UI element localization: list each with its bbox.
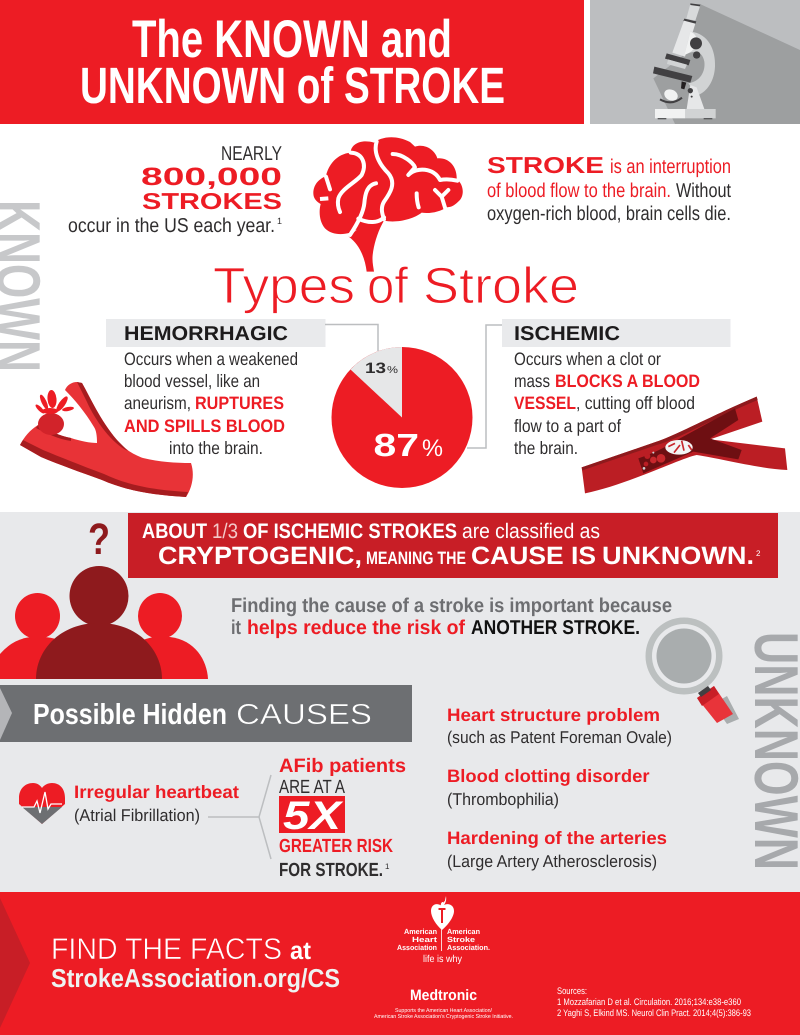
sources: 1 Mozzafarian D et al. Circulation. 2016;134:e38-e360 (557, 997, 741, 1008)
callout: cryptogenic banner: 2 (756, 549, 761, 558)
heading: possible hidden causes (0, 685, 412, 742)
callout: AFib 5X risk: FOR STROKE. (279, 860, 383, 881)
pie chart: stroke types: % (387, 365, 398, 376)
sources (557, 986, 751, 1019)
stat: 800,000 strokes: 800,000 (141, 163, 282, 191)
callout: cryptogenic banner: 1/3 (212, 520, 238, 543)
icon: question mark: ? (88, 515, 110, 564)
sources: Sources: (557, 986, 587, 997)
stroke definition: is an interruption (610, 156, 731, 178)
logo: American Heart / Stroke Association: American (447, 927, 480, 936)
header banner (0, 0, 584, 124)
text: why finding the cause matters: ANOTHER STROKE. (471, 617, 640, 639)
cause: blood clotting disorder: Blood clotting disorder (447, 766, 650, 786)
stroke definition: oxygen-rich blood, brain cells die. (487, 203, 731, 225)
hemorrhagic heading (106, 319, 326, 347)
cause: blood clotting disorder: (Thrombophilia) (447, 790, 559, 809)
cause: heart structure problem: Heart structure problem (447, 705, 660, 725)
logo: American Heart / Stroke Association: Association. (447, 943, 490, 952)
stat: 800,000 strokes (68, 143, 282, 237)
logo: American Heart / Stroke Association: Stroke (447, 935, 475, 944)
logo: American Heart / Stroke Association: life is why (423, 954, 462, 965)
logo: American Heart / Stroke Association: Association (397, 943, 437, 952)
cause: hardening of the arteries: (Large Artery Atherosclerosis) (447, 852, 657, 871)
ischemic description: , cutting off blood (576, 393, 695, 413)
cause: hardening of the arteries: Hardening of the arteries (447, 828, 667, 848)
title (80, 10, 505, 114)
stroke definition (487, 152, 731, 225)
callout: AFib 5X risk (279, 755, 406, 881)
hemorrhagic description: Occurs when a weakened (124, 349, 298, 369)
cause: irregular heartbeat (74, 782, 239, 825)
heading: possible hidden causes: Possible Hidden (33, 699, 227, 731)
5X badge: 5X (283, 794, 344, 838)
text: why finding the cause matters (231, 595, 672, 639)
callout: cryptogenic banner: ABOUT (142, 520, 207, 543)
ischemic description: the brain. (514, 438, 578, 458)
footer panel (0, 892, 800, 1035)
title: UNKNOWN of STROKE (80, 57, 505, 114)
callout: AFib 5X risk: 1 (385, 862, 390, 871)
call to action: at (290, 937, 312, 965)
logo: Medtronic sponsor: American Stroke Association's Cryptogenic Stroke Initiative. (374, 1014, 513, 1020)
callout: AFib 5X risk: AFib patients (279, 755, 406, 777)
cause: irregular heartbeat: (Atrial Fibrillation) (74, 806, 200, 825)
ischemic description: BLOCKS A BLOOD (555, 371, 700, 391)
cause: irregular heartbeat: Irregular heartbeat (74, 782, 239, 802)
text: why finding the cause matters: Finding the cause of a stroke is important because (231, 595, 672, 617)
panel: ischemic (502, 319, 787, 493)
cause: heart structure problem (447, 705, 672, 747)
hemorrhagic description (124, 349, 298, 458)
stat: 800,000 strokes: STROKES (142, 188, 282, 214)
callout: cryptogenic banner: UNKNOWN. (602, 542, 754, 570)
title: The KNOWN and (132, 10, 452, 69)
panel: unknown section background (0, 512, 800, 892)
callout: AFib 5X risk: ARE AT A (279, 777, 345, 798)
ischemic description: Occurs when a clot or (514, 349, 661, 369)
callout: cryptogenic banner (128, 513, 778, 578)
icon: microscope panel (590, 0, 800, 124)
icon: blocked vessel (582, 397, 787, 493)
hemorrhagic description: AND SPILLS BLOOD (124, 416, 285, 436)
pie chart: stroke types (332, 347, 472, 488)
hemorrhagic description: into the brain. (169, 438, 263, 458)
logo: American Heart / Stroke Association: Heart (412, 935, 438, 944)
stat: 800,000 strokes: NEARLY (221, 143, 282, 165)
callout: cryptogenic banner: are classified as (462, 520, 600, 543)
cause: hardening of the arteries (447, 828, 667, 871)
logo: Medtronic sponsor: Supports the American Heart Association/ (395, 1008, 492, 1014)
connector: bracket to AFib risk (208, 775, 271, 859)
ischemic heading (502, 319, 730, 347)
heading: Types of Stroke: Stroke (423, 257, 579, 314)
ischemic description: mass (514, 371, 550, 391)
icon: brain (313, 137, 463, 272)
ischemic description: VESSEL (514, 393, 576, 413)
stroke definition: of blood flow to the brain. (487, 180, 671, 202)
call to action (51, 933, 340, 993)
panel: hemorrhagic (20, 319, 326, 497)
stat: 800,000 strokes: 1 (277, 216, 282, 226)
logo: Medtronic sponsor (374, 987, 513, 1020)
cause: blood clotting disorder (447, 766, 650, 809)
text: why finding the cause matters: helps reduce the risk of (247, 617, 465, 639)
icon: magnifying glass (646, 618, 739, 724)
callout: cryptogenic banner: CRYPTOGENIC, (158, 542, 362, 570)
pie chart: stroke types: 87 (374, 427, 419, 463)
connector: hemorrhagic to pie (325, 324, 378, 351)
logo: American Heart / Stroke Association (397, 896, 490, 965)
callout: cryptogenic banner: CAUSE IS (471, 542, 596, 570)
callout: cryptogenic banner: MEANING THE (366, 548, 466, 568)
stroke definition: Without (676, 180, 731, 202)
ischemic description (514, 349, 700, 458)
connector: pie to ischemic (467, 325, 502, 448)
call to action: FIND THE FACTS (51, 933, 282, 966)
pie chart: stroke types: 13 (365, 360, 386, 377)
callout: AFib 5X risk: GREATER RISK (279, 836, 393, 857)
stat: 800,000 strokes: occur in the US each year. (68, 215, 275, 237)
heading: possible hidden causes: CAUSES (236, 699, 372, 731)
hemorrhagic heading: HEMORRHAGIC (124, 323, 288, 345)
ischemic description: flow to a part of (514, 416, 622, 436)
heading: Types of Stroke: of (367, 257, 409, 314)
hemorrhagic description: blood vessel, like an (124, 371, 260, 391)
logo: American Heart / Stroke Association: American (404, 927, 437, 936)
stroke definition: STROKE (487, 152, 604, 178)
sources: 2 Yaghi S, Elkind MS. Neurol Clin Pract. 2014;4(5):386-93 (557, 1008, 751, 1019)
text: why finding the cause matters: it (231, 617, 241, 639)
heading: Types of Stroke: Types (213, 257, 355, 314)
callout: cryptogenic banner: OF ISCHEMIC STROKES (243, 520, 457, 543)
hemorrhagic description: aneurism, (124, 393, 191, 413)
pie chart: stroke types: % (422, 435, 443, 462)
icon: group of people (0, 566, 208, 679)
icon: heart with ECG line (19, 783, 65, 824)
cause: heart structure problem: (such as Patent Foreman Ovale) (447, 728, 672, 747)
heading: Types of Stroke (213, 257, 579, 314)
icon: ruptured vessel (20, 382, 193, 497)
ischemic heading: ISCHEMIC (514, 323, 620, 345)
logo: Medtronic sponsor: Medtronic (410, 987, 477, 1004)
call to action: StrokeAssociation.org/CS (51, 963, 340, 993)
hemorrhagic description: RUPTURES (195, 393, 284, 413)
